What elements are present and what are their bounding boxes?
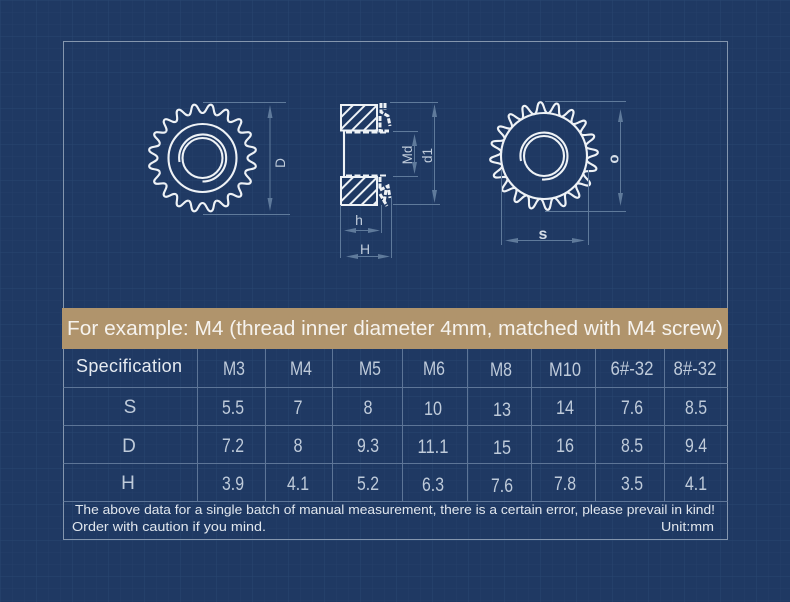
row S [124,397,707,421]
footnote: Order with caution if you mind. [72,519,266,534]
diagram: front view of toothed nut with D dimension [147,102,290,214]
row H: 3.5 [621,474,643,495]
dimension o [545,102,626,212]
footnote: The above data for a single batch of manual measurement, there is a certain error, please prevail in kind! [75,502,715,517]
row H [121,473,707,497]
icon: serrated gear rear view [489,101,599,211]
row S: 7 [294,398,302,419]
header row: M3 [223,359,245,380]
row S: 7.6 [621,398,643,419]
row S: 8 [364,398,372,419]
hatched section top [341,105,377,130]
dimensions d1 and Md: d1 [420,148,435,163]
row S: 8.5 [685,398,707,419]
row D [122,436,707,459]
dimension s: s [539,226,548,243]
header row: M8 [490,360,512,381]
dimension D [203,102,290,214]
hatched section bottom [341,177,377,205]
row H: 4.1 [287,474,309,495]
row D: 11.1 [418,437,448,458]
icon: wavy toothed gear outline [147,103,258,213]
row H: 3.9 [222,474,244,495]
row S: 10 [424,399,442,420]
row D: 8 [294,436,302,457]
row S: 5.5 [222,398,244,419]
table grid lines [64,349,728,502]
row S: S [124,397,136,418]
row D: 7.2 [222,436,244,457]
row S: 14 [556,398,574,419]
dimension o: o [606,154,622,164]
header row: M4 [290,359,312,380]
row H: H [121,473,135,494]
header row: M10 [549,360,581,381]
dimensions h and H [340,196,392,259]
row D: 9.4 [685,436,707,457]
row S: 13 [493,400,511,421]
row H: 6.3 [422,475,444,496]
dimensions d1 and Md: Md [400,146,415,164]
banner: M4 example: For example: M4 (thread inner diameter 4mm, matched with M4 screw) [67,317,723,340]
dimensions h and H: h [355,212,363,228]
serrated teeth edge [380,103,390,206]
header row: Specification [76,356,182,376]
dimension s [502,170,588,245]
diagram: section view with h, H, Md, d1 dimensions [340,102,440,259]
row H: 7.6 [491,476,513,497]
dimension D: D [273,158,288,168]
row D: 16 [556,436,574,457]
footnote: Unit:mm [661,519,714,534]
row H: 5.2 [357,474,379,495]
specification table [64,349,728,502]
outer frame [64,42,728,540]
row D: 15 [493,438,511,459]
row D: D [122,436,136,457]
bore [344,131,386,177]
dimensions d1 and Md [390,102,440,204]
header row: 6#-32 [610,359,654,380]
diagram: rear view of toothed nut with s and o dimensions [489,101,626,245]
row D: 8.5 [621,436,643,457]
footnote [72,502,715,534]
row H: 4.1 [685,474,707,495]
header row: 8#-32 [674,359,716,380]
row H: 7.8 [554,474,576,495]
banner: M4 example [62,308,728,349]
header row: M6 [423,359,445,380]
header row [76,356,716,381]
row D: 9.3 [357,436,379,457]
header row: M5 [359,359,381,380]
dimensions h and H: H [360,241,370,257]
